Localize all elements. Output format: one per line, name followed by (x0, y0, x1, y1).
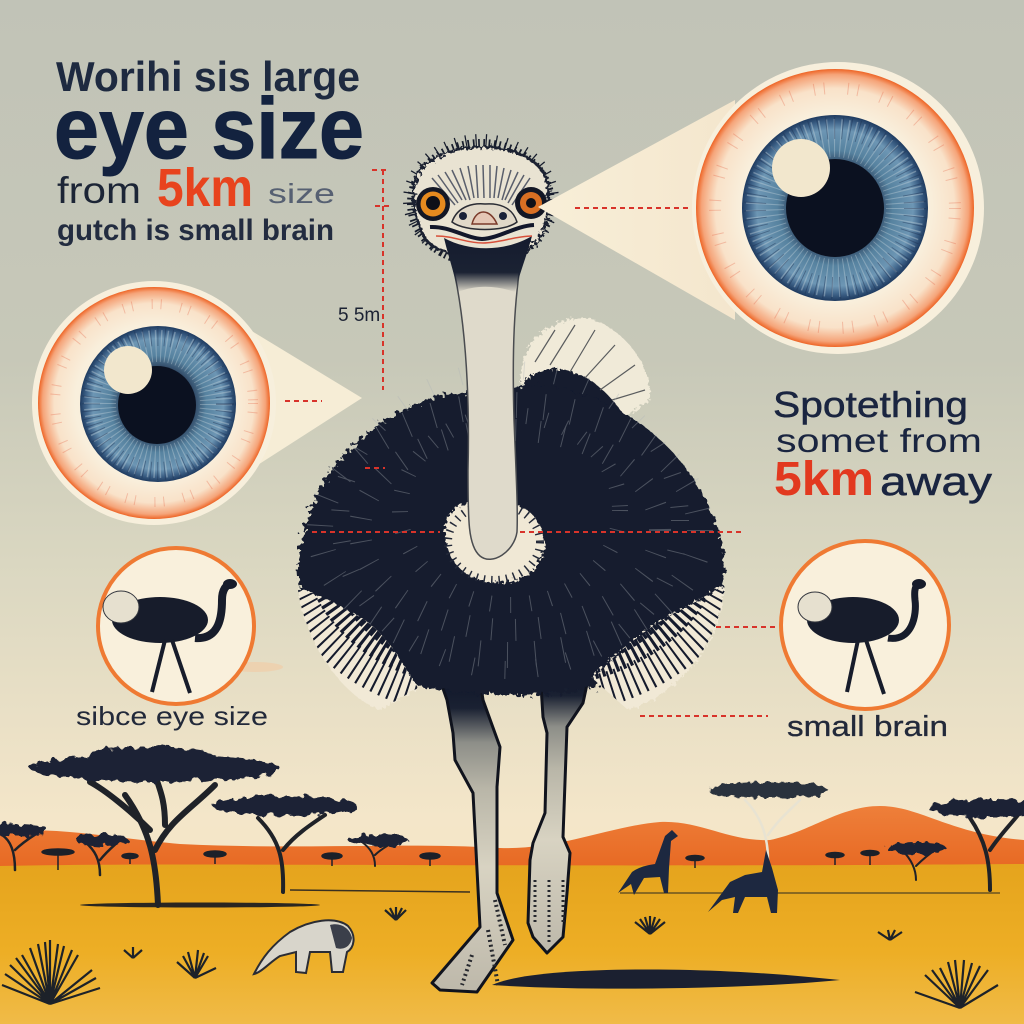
heading text block: Worihi sis large (56, 53, 360, 100)
small ostrich badge: right (781, 541, 949, 709)
black body (298, 385, 725, 695)
ostrich (285, 140, 740, 992)
eye left (416, 187, 450, 221)
neck (450, 255, 522, 559)
right white wing feathers (592, 584, 726, 710)
feather highlight streaks (320, 370, 700, 670)
label: small brain: small brain (787, 711, 948, 743)
crown feather lines (432, 165, 530, 205)
callout cone to large eye (538, 100, 735, 320)
side caption: spot from 5km: 5km (774, 453, 874, 506)
side caption: spot from 5km: somet from (776, 422, 982, 459)
label: eye size: sibce eye size (76, 701, 268, 731)
small grey animal (254, 920, 354, 974)
acacia trees (2, 775, 1018, 905)
faint sky smudge (227, 662, 283, 672)
large eye callout (692, 62, 984, 354)
dark throat (444, 236, 532, 292)
head (414, 147, 548, 258)
measure label: 5 5m (338, 305, 380, 326)
left white wing feathers (298, 588, 419, 710)
side caption: spot from 5km (773, 384, 992, 506)
grass tufts (2, 907, 998, 1008)
savanna landscape (0, 747, 1024, 1024)
side caption: spot from 5km: Spotething (773, 384, 968, 425)
left eye callout (32, 281, 276, 525)
distant orange hills (0, 806, 1024, 880)
ground shadows (80, 890, 1000, 989)
small ostrich badge: left (98, 548, 254, 704)
side caption: spot from 5km: away (880, 460, 992, 504)
heading text block: from (57, 170, 141, 211)
heading text block: 5km (157, 158, 253, 218)
back foot toes (535, 880, 563, 945)
beak (452, 204, 517, 230)
head fur ring (409, 140, 553, 260)
yellow ground (0, 864, 1024, 1024)
silhouette animals (618, 830, 778, 913)
front foot scales (462, 900, 505, 985)
callout cone from left eye (250, 330, 362, 470)
tail plume (521, 318, 650, 420)
back leg (528, 670, 590, 953)
front leg (432, 680, 513, 992)
eye right (515, 187, 547, 219)
heading text block: gutch is small brain (57, 214, 334, 247)
heading text block: eye size (54, 81, 364, 177)
heading text block (54, 53, 364, 247)
red dashed measure lines (285, 170, 775, 716)
heading text block: size (268, 178, 335, 209)
neck base ruff (445, 503, 545, 583)
mouth line (430, 225, 534, 239)
